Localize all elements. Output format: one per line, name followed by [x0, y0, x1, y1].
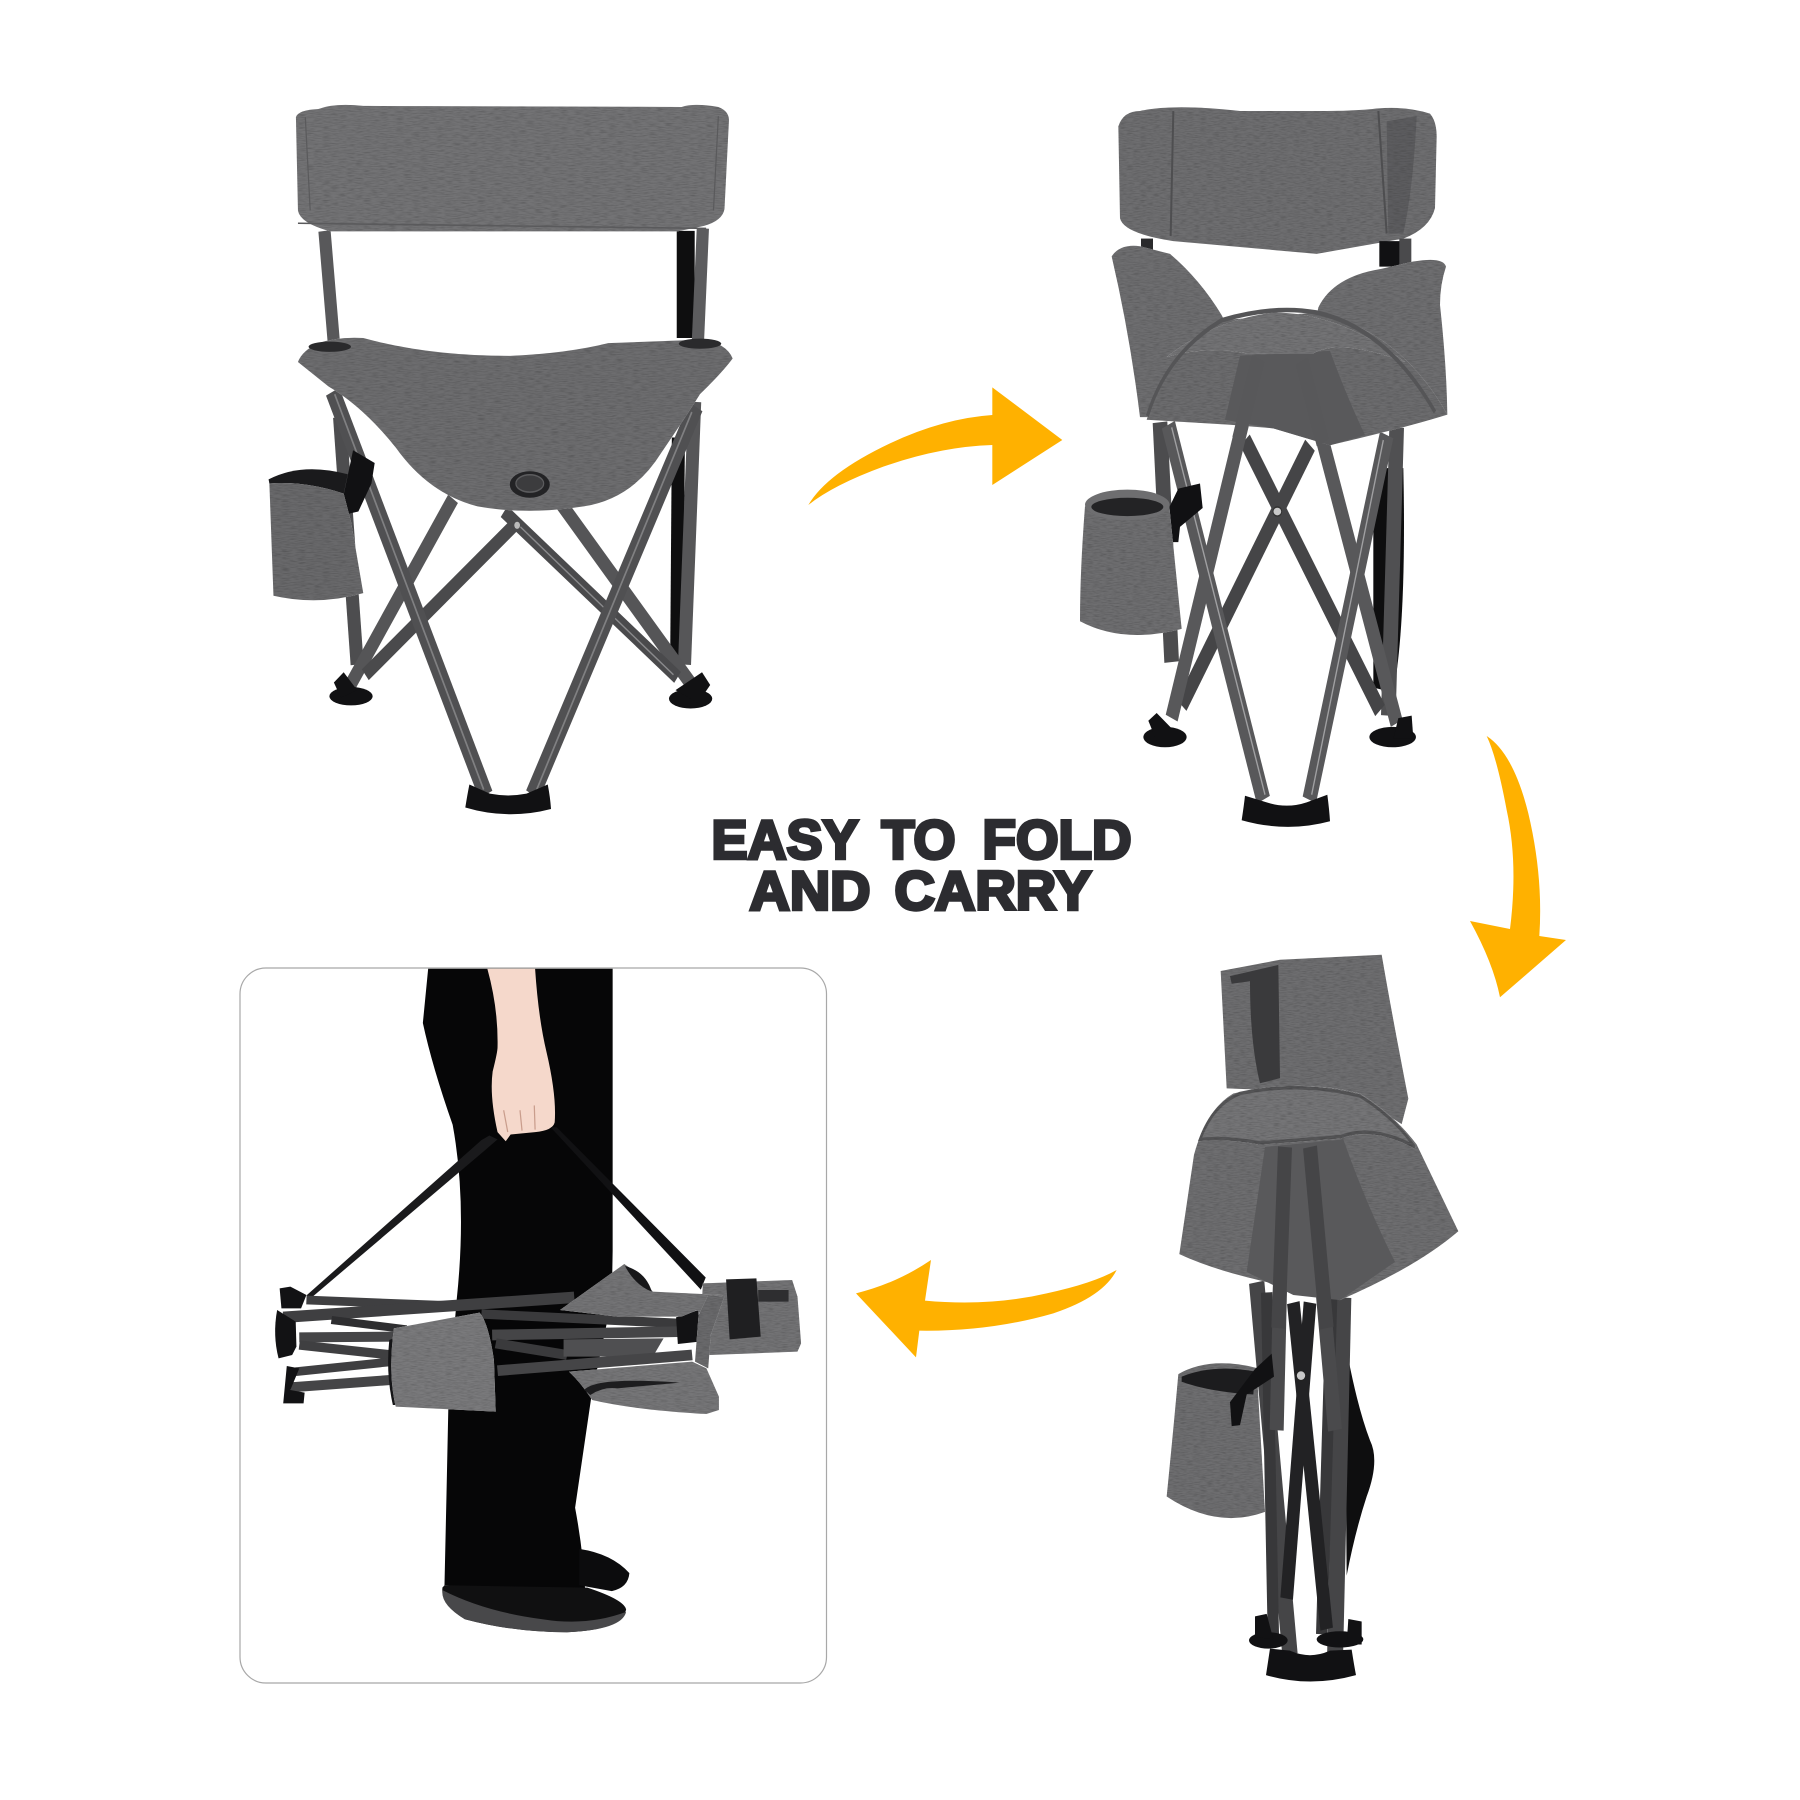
panel frame	[240, 968, 826, 1683]
person	[307, 969, 706, 1632]
title line 2: CARRY	[894, 860, 1092, 922]
bottom flap opening	[584, 1381, 680, 1395]
cup holder	[1080, 483, 1203, 635]
backrest stitching	[298, 116, 718, 228]
seat top flap	[1200, 1088, 1415, 1147]
bundle gap	[758, 1290, 789, 1302]
backrest	[296, 105, 729, 231]
chair: half folded	[1080, 107, 1447, 827]
cup holder	[388, 1313, 496, 1412]
chair: nearly folded	[1167, 955, 1458, 1681]
feet	[329, 672, 712, 814]
leg bundle	[1257, 1150, 1343, 1660]
title	[712, 808, 1132, 922]
arrow: open chair to half folded	[808, 387, 1062, 505]
title line 2: AND	[750, 860, 870, 922]
cup holder	[1167, 1354, 1274, 1518]
backrest side shadow	[1387, 116, 1417, 233]
top seat flap	[1167, 313, 1405, 362]
bottom seat flap	[569, 1362, 719, 1414]
seat grommet	[510, 471, 550, 498]
seat pivots	[309, 339, 721, 352]
posts	[1141, 239, 1411, 267]
feet	[1249, 1614, 1363, 1681]
back shoe	[579, 1549, 629, 1591]
right bundle	[699, 1280, 801, 1355]
rods	[283, 1297, 692, 1387]
crossed rear tubes	[349, 499, 692, 688]
hook strap	[726, 1278, 761, 1339]
front legs	[333, 392, 696, 795]
title line 1: FOLD	[982, 808, 1132, 870]
inner seat panel	[1225, 351, 1365, 445]
folded backrest	[1221, 955, 1408, 1124]
flap opening	[625, 1266, 652, 1292]
feet	[1143, 713, 1416, 827]
arrow: half folded to nearly folded	[1470, 736, 1566, 997]
left seat wing	[1112, 246, 1247, 417]
title line 1: EASY	[712, 808, 858, 870]
black strap	[1346, 1359, 1374, 1576]
top seat flap	[560, 1264, 722, 1327]
inner seat panel	[1247, 1139, 1395, 1300]
lower seat fabric	[1147, 313, 1447, 445]
carry strap right	[551, 1127, 706, 1290]
front shoe	[442, 1585, 626, 1632]
backrest fold shadow	[1230, 965, 1280, 1083]
trousers	[423, 969, 613, 1593]
fingers	[504, 1105, 535, 1132]
chair: fully open, front view	[269, 105, 733, 814]
seat fabric	[1179, 1086, 1458, 1300]
upper legs over the panel	[1238, 358, 1323, 443]
arrow: folded chair to carried	[856, 1260, 1117, 1357]
front legs	[1168, 425, 1387, 800]
backrest	[1118, 107, 1437, 254]
foot caps	[275, 1287, 699, 1403]
seat	[298, 338, 733, 511]
rear legs	[1160, 422, 1397, 716]
folded chair	[275, 1264, 801, 1414]
upper legs over panel	[1278, 1147, 1327, 1328]
seat edge binding	[1147, 310, 1435, 416]
arm and hand	[487, 969, 555, 1141]
panel: carrying the folded chair	[240, 968, 826, 1683]
carry strap left	[307, 1135, 498, 1298]
rear legs and black strap	[324, 228, 703, 665]
right seat wing	[1307, 260, 1447, 417]
backrest folds	[1171, 111, 1387, 236]
shoe sole	[442, 1590, 626, 1632]
seat side fabric	[695, 1295, 724, 1368]
title line 1: TO	[882, 808, 956, 870]
black strap	[1373, 468, 1404, 693]
cup holder	[269, 450, 375, 600]
crossed tubes	[1172, 358, 1397, 723]
